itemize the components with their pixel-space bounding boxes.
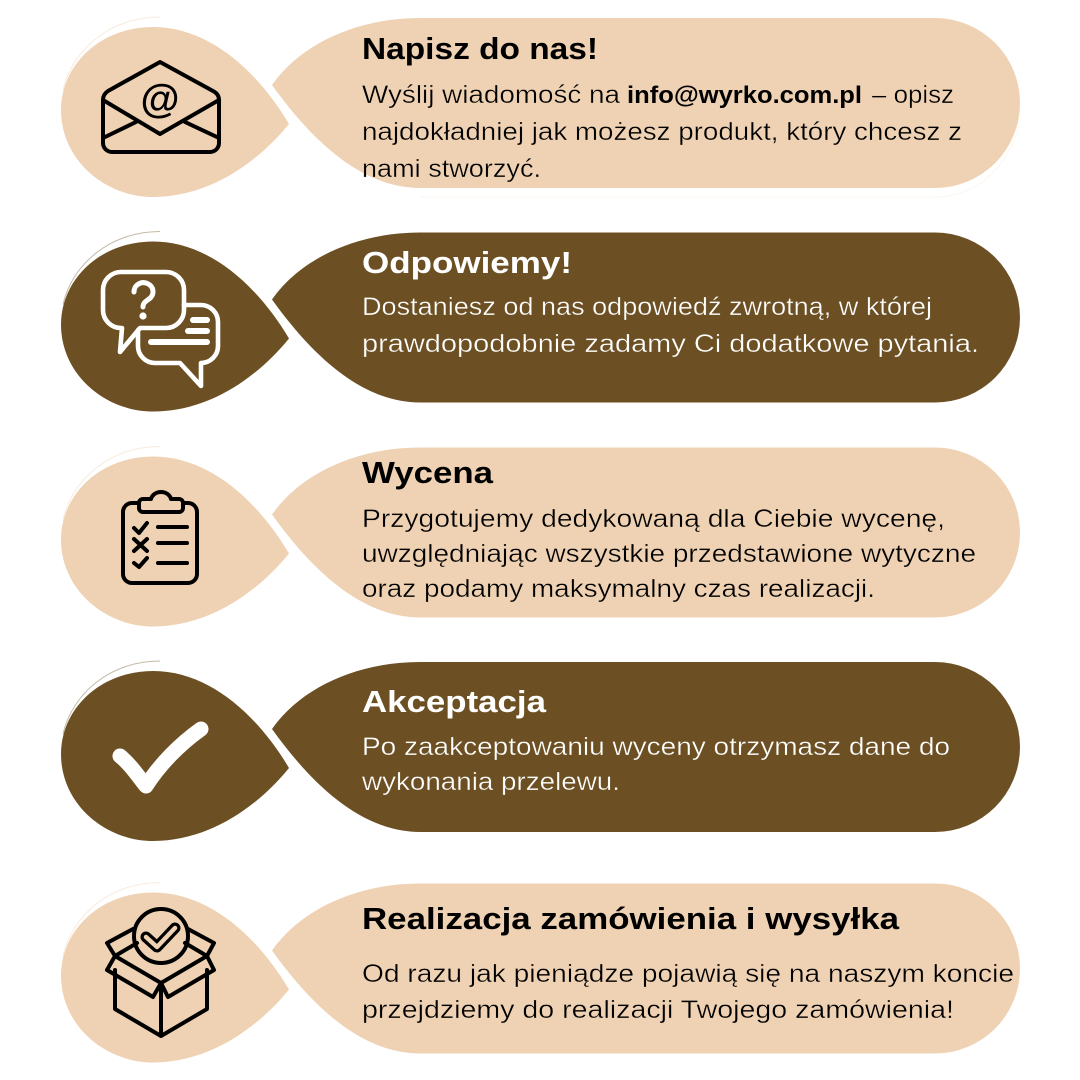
heading 3: Wycena: [362, 455, 494, 490]
pill background 3: [272, 448, 1020, 618]
heading 1: Napisz do nas!: [362, 31, 598, 66]
step 4: acceptance: [61, 661, 1020, 841]
pill background 4: [272, 662, 1020, 832]
pill background 2: [272, 232, 1020, 402]
step 3: quote: [61, 446, 1020, 626]
step 1: write to us: [61, 17, 1020, 197]
body text 2: [362, 293, 979, 358]
icon: check mark: [120, 729, 201, 786]
pill background 1: [272, 18, 1020, 188]
body text 1: [362, 81, 962, 183]
step 2: we reply: [61, 232, 1020, 412]
icon: envelope with at sign: [103, 62, 219, 152]
body text 4: wykonania przelewu.: [361, 768, 620, 796]
heading 4: Akceptacja: [362, 684, 547, 719]
body text 5: [362, 960, 1014, 1024]
body text 3: oraz podamy maksymalny czas realizacji.: [362, 575, 875, 603]
pill background 5: [272, 884, 1020, 1054]
body text 4: Po zaakceptowaniu wyceny otrzymasz dane do: [362, 733, 950, 761]
drop background 2: [61, 242, 289, 412]
icon: clipboard checklist: [123, 492, 197, 583]
body text 1: Wyślij wiadomość na: [362, 81, 620, 109]
body text 2: prawdopodobnie zadamy Ci dodatkowe pytania.: [362, 330, 979, 358]
body text 1: najdokładniej jak możesz produkt, który chcesz z: [362, 118, 962, 146]
heading 2: Odpowiemy!: [362, 245, 572, 280]
heading 5: Realizacja zamówienia i wysyłka: [362, 901, 900, 936]
icon: envelope with at sign: @: [140, 77, 180, 121]
body text 5: Od razu jak pieniądze pojawią się na naszym koncie: [362, 960, 1014, 988]
drop background 5: [61, 892, 289, 1062]
drop background 4: [61, 671, 289, 841]
body text 1: info@wyrko.com.pl: [627, 82, 862, 109]
drop background 1: [61, 27, 289, 197]
body text 3: [362, 505, 976, 603]
drop background 3: [61, 456, 289, 626]
body text 5: przejdziemy do realizacji Twojego zamówienia!: [362, 996, 954, 1024]
body text 3: uwzględniając wszystkie przedstawione wytyczne: [362, 540, 976, 568]
body text 4: [361, 733, 950, 796]
body text 2: Dostaniesz od nas odpowiedź zwrotną, w której: [362, 293, 932, 321]
icon: chat bubbles with question mark: [103, 272, 218, 386]
step 5: fulfilment and shipping: [61, 882, 1020, 1062]
body text 3: Przygotujemy dedykowaną dla Ciebie wycenę,: [362, 505, 945, 533]
body text 1: nami stworzyć.: [362, 155, 541, 183]
icon: box with check badge: [107, 909, 214, 1036]
body text 1: – opisz: [872, 81, 954, 109]
